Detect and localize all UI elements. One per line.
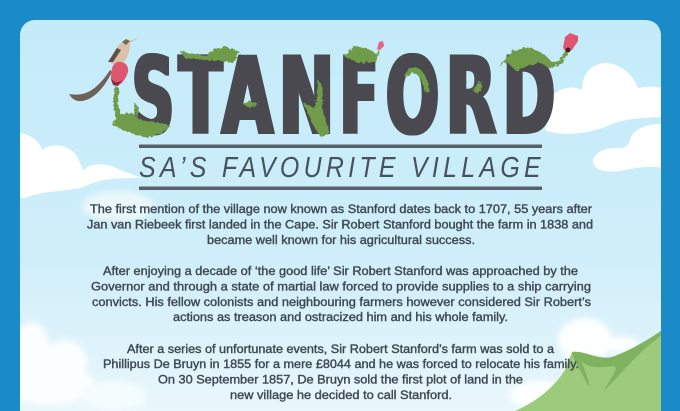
cloud: upper left [20, 133, 142, 198]
title: S [132, 35, 174, 158]
title [132, 35, 555, 158]
cloud: bottom left [87, 381, 146, 410]
vine: A [243, 101, 258, 108]
paragraph two: After enjoying a decade of ‘the good life’ Sir Robert Stanford was approached by the [103, 264, 578, 278]
rule top [139, 144, 542, 148]
paragraph two: convicts. His fellow colonists and neighbouring farmers however considered Sir Robert’s [92, 295, 591, 309]
paragraph one: became well known for his agricultural success. [207, 233, 475, 247]
title: O [386, 35, 439, 158]
vine: R [472, 80, 482, 93]
vine: F top [344, 46, 380, 63]
cloud: right small [593, 124, 661, 172]
title: A [222, 35, 273, 158]
paragraph one: The first mention of the village now known as Stanford dates back to 1707, 55 years after [90, 202, 592, 216]
title: D [503, 35, 555, 158]
paragraph three [103, 342, 579, 402]
paragraph one: Jan van Riebeek first landed in the Cape. Sir Robert Stanford bought the farm in 1838 and [87, 218, 593, 232]
paragraph three: Phillipus De Bruyn in 1855 for a mere £8044 and he was forced to relocate his family. [103, 357, 579, 371]
paragraph one [87, 202, 593, 247]
paragraph three: new village he decided to call Stanford. [230, 388, 452, 402]
vine: S base [112, 86, 171, 138]
paragraph three: On 30 September 1857, De Bruyn sold the first plot of land in the [158, 372, 523, 386]
icon: protea on D [563, 33, 578, 52]
vine: T top [180, 47, 240, 63]
vine: O [404, 67, 430, 92]
cloud: behind hill [510, 318, 639, 409]
vines on title letters [112, 46, 568, 138]
paragraph two: actions as treason and ostracized him and his whole family. [173, 310, 508, 324]
vine: N [303, 79, 330, 137]
title: R [446, 35, 496, 158]
cloud: lower left [20, 320, 94, 406]
icon: protea flower with bird [111, 62, 128, 86]
title: T [179, 35, 222, 158]
leaf: S upper [134, 102, 139, 118]
title: F [340, 35, 378, 158]
paragraph two: Governor and through a state of martial law forced to provide supplies to a ship carrying [91, 280, 591, 294]
paragraph three: After a series of unfortunate events, Sir Robert Stanford’s farm was sold to a [127, 342, 554, 356]
hill [515, 331, 661, 411]
cloud: upper right [545, 63, 661, 134]
vine: D top [499, 47, 568, 71]
paragraph two [91, 264, 591, 324]
cloud: behind first paragraph [82, 191, 154, 221]
rule bottom [139, 186, 542, 190]
icon: protea on F [377, 41, 384, 50]
subtitle: SA’S FAVOURITE VILLAGE [139, 151, 542, 183]
title: N [279, 35, 334, 158]
icon: sugarbird [69, 38, 138, 101]
